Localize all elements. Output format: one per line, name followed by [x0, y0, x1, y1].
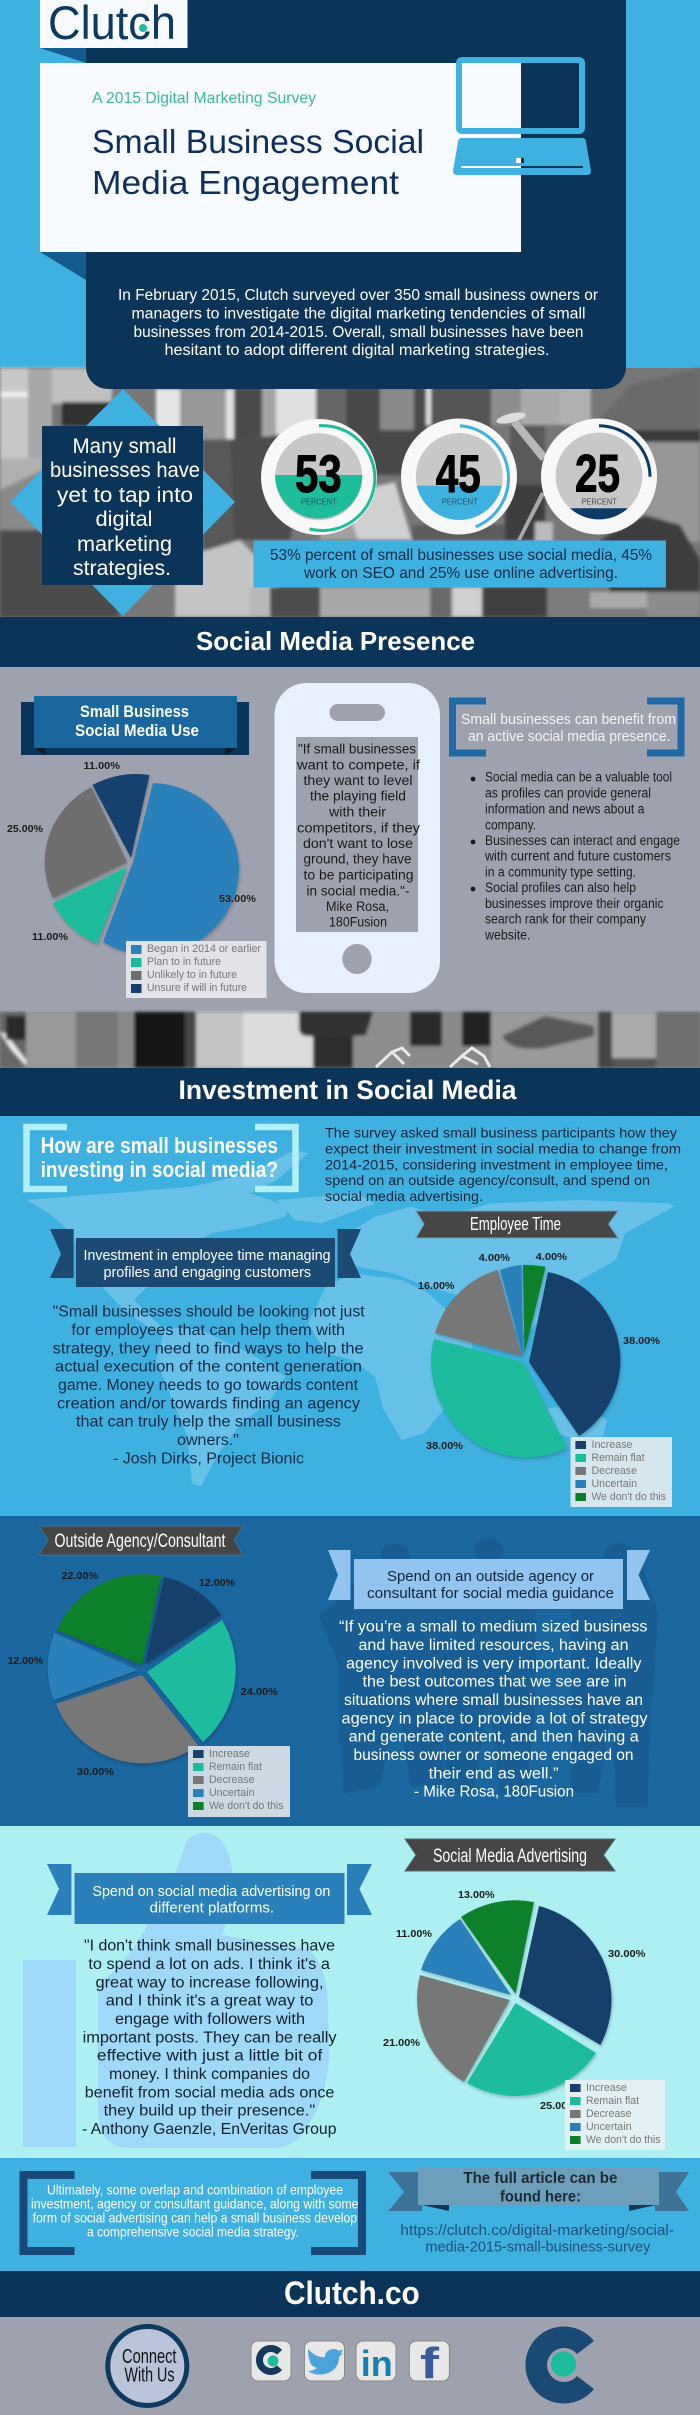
intro paragraph: In February 2015, Clutch surveyed over 350 small business owners or [118, 287, 598, 304]
quote: Josh Dirks [53, 1304, 365, 1467]
quote: Mike Rosa: agency involved is very important. Ideally [346, 1655, 642, 1672]
callout: many small businesses: yet to tap into [57, 484, 193, 507]
ribbon: small business social media use: Social Media Use [75, 722, 199, 740]
quote: Josh Dirks: actual execution of the content generation [55, 1359, 362, 1376]
ribbon: spend on social media advertising: different platforms. [150, 1900, 274, 1917]
stat: 25 percent: PERCENT [582, 498, 617, 506]
footer band: Clutch.co [0, 2271, 700, 2317]
survey paragraph [325, 1125, 681, 1204]
banner: outside agency/consultant: Outside Agency/Consultant [54, 1531, 226, 1552]
quote: Josh Dirks: strategy, they need to find ways to help the [53, 1340, 364, 1357]
pie chart: social media advertising: 11.00% [396, 1928, 433, 1940]
callout: many small businesses [10, 389, 235, 616]
phone quote text: they want to level [304, 773, 412, 788]
pie chart: employee time [418, 1251, 672, 1507]
pie chart: social media advertising: 30.00% [608, 1948, 646, 1960]
icon: laptop [453, 60, 591, 175]
pie chart: outside agency: 12.00% [8, 1655, 44, 1667]
quote: Anthony Gaenzle: to spend a lot on ads. I think it's a [88, 1956, 330, 1973]
legend: Uncertain [592, 1478, 637, 1490]
pie chart: employee time: 4.00% [479, 1252, 511, 1264]
quote: Mike Rosa: agency in place to provide a lot of strategy [342, 1710, 648, 1727]
article url [400, 2223, 674, 2256]
ribbon: investment in employee time: profiles and engaging customers [104, 1264, 311, 1281]
ribbon: full article: found here: [500, 2189, 581, 2206]
bracket: conclusion text: Ultimately, some overlap and combination of employee [47, 2182, 343, 2197]
stat: 45 percent: PERCENT [442, 498, 478, 506]
bullet list: as profiles can provide general [485, 786, 651, 801]
icon: linkedin: in [361, 2343, 393, 2384]
phone with quote [274, 683, 440, 993]
quote: Anthony Gaenzle: engage with followers with [115, 2011, 305, 2028]
bullet list: businesses improve their organic [485, 896, 664, 911]
article url: media-2015-small-business-survey [425, 2240, 651, 2256]
legend: Remain flat [586, 2095, 639, 2107]
quote: Mike Rosa: “If you’re a small to medium sized business [339, 1619, 648, 1636]
stat: 45 percent: 45 [436, 445, 481, 504]
bracket: conclusion text [24, 2175, 362, 2251]
legend: Increase [592, 1439, 632, 1451]
quote: Josh Dirks: that can truly help the small business [76, 1414, 341, 1431]
legend: Remain flat [592, 1452, 644, 1464]
badge: connect with us: With Us [124, 2365, 174, 2387]
pie chart: social media advertising: 13.00% [458, 1889, 495, 1901]
quote: Anthony Gaenzle: they build up their presence." [104, 2103, 315, 2120]
survey paragraph: social media advertising. [325, 1188, 483, 1204]
legend: Uncertain [209, 1787, 254, 1799]
pie chart: social media use: 53.00% [219, 893, 257, 905]
banner: outside agency/consultant [39, 1526, 243, 1555]
icon: facebook: f [420, 2339, 439, 2388]
bullet list: company. [485, 817, 536, 832]
bullet list: website. [484, 927, 530, 942]
ribbon: full article [388, 2167, 689, 2211]
intro paragraph: managers to investigate the digital marketing tendencies of small [132, 306, 586, 322]
title: Small Business Social [92, 123, 424, 160]
footer band: Clutch.co: Clutch.co [284, 2275, 420, 2311]
pie chart: social media use: 11.00% [32, 931, 69, 943]
bracket: conclusion text: form of social advertising can help a small business develop [33, 2210, 357, 2225]
callout: many small businesses: businesses have [50, 459, 200, 482]
bullet list: information and news about a [485, 801, 645, 816]
heading band: Investment in Social Media: Investment in Social Media [178, 1075, 517, 1105]
legend: Uncertain [586, 2121, 632, 2133]
ribbon: spend on social media advertising: Spend on social media advertising on [92, 1883, 330, 1900]
survey subtitle: A 2015 Digital Marketing Survey [92, 90, 316, 107]
stat: 25 percent [541, 418, 657, 534]
bullet list: Businesses can interact and engage [485, 833, 680, 848]
pie chart: outside agency: 24.00% [241, 1686, 279, 1698]
pie chart: outside agency [8, 1570, 290, 1817]
quote: Josh Dirks: owners." [177, 1432, 239, 1449]
panel: outside agency [0, 1516, 700, 1826]
quote: Mike Rosa [339, 1619, 648, 1801]
callout: many small businesses: marketing [77, 533, 172, 556]
ribbon: spend on outside agency: Spend on an outside agency or [387, 1568, 594, 1585]
callout: many small businesses: Many small [72, 435, 176, 458]
pie chart: social media use: 25.00% [7, 823, 44, 835]
panel: social media advertising [0, 1826, 700, 2158]
legend: Plan to in future [147, 956, 221, 968]
quote: Anthony Gaenzle: benefit from social media ads once [85, 2084, 334, 2101]
quote: Anthony Gaenzle: effective with just a little bit of [97, 2048, 323, 2065]
bracket heading: how are small businesses investing: How are small businesses [41, 1133, 278, 1158]
phone quote text: in social media."- [306, 883, 410, 898]
quote: Mike Rosa: and generate content, and then having a [349, 1729, 639, 1746]
stats summary box: 53% percent of small businesses use social media, 45% [270, 547, 652, 564]
quote: Josh Dirks: game. Money needs to go towards content [58, 1377, 359, 1394]
phone quote text: want to compete, if [296, 757, 420, 772]
ribbon: investment in employee time: Investment in employee time managing [84, 1247, 330, 1264]
quote: Mike Rosa: situations where small businesses have an [344, 1692, 643, 1709]
quote: Josh Dirks: - Josh Dirks, Project Bionic [113, 1450, 304, 1467]
stat: 53 percent: PERCENT [301, 498, 337, 506]
phone quote text: with their [328, 805, 387, 820]
legend: Decrease [209, 1774, 254, 1786]
stat: 45 percent [401, 418, 517, 534]
phone quote text: competitors, if they [297, 820, 420, 835]
quote: Mike Rosa: business owner or someone engaged on [354, 1747, 634, 1764]
pie chart: outside agency: 12.00% [199, 1577, 236, 1589]
quote: Anthony Gaenzle: "I don't think small businesses have [84, 1938, 335, 1955]
pie chart: employee time: 16.00% [418, 1280, 455, 1292]
quote: Mike Rosa: the best outcomes that we see are in [362, 1674, 626, 1691]
pie chart: outside agency: 22.00% [62, 1570, 99, 1582]
banner: social media advertising [405, 1839, 615, 1871]
bullet list: with current and future customers [484, 849, 671, 864]
legend: Unsure if will in future [147, 982, 247, 994]
badge: connect with us [108, 2326, 187, 2406]
panel: employee time [0, 1116, 700, 1516]
panel: conclusion [0, 2158, 700, 2271]
phone quote text: don't want to lose [303, 836, 413, 851]
banner: social media advertising: Social Media Advertising [433, 1846, 587, 1867]
stats summary box [254, 540, 666, 588]
bracket: conclusion text: a comprehensive social media strategy. [87, 2224, 299, 2239]
legend: Decrease [592, 1465, 637, 1477]
stat: 53 percent: 53 [295, 445, 342, 504]
badge: connect with us: Connect [122, 2346, 177, 2368]
phone quote text: Mike Rosa, [326, 899, 389, 914]
pie chart: social media use: 11.00% [84, 760, 121, 772]
legend [188, 1746, 290, 1817]
quote: Anthony Gaenzle: important posts. They can be really [83, 2029, 337, 2046]
ribbon: small business social media use: Small Business [80, 703, 189, 721]
legend: We don't do this [592, 1491, 666, 1503]
stat: 25 percent: 25 [575, 444, 620, 504]
bracket heading: benefit: Small businesses can benefit from [461, 712, 676, 728]
title [92, 123, 424, 201]
legend: Increase [586, 2082, 627, 2094]
survey paragraph: The survey asked small business participants how they [325, 1125, 677, 1141]
pie chart: employee time: 38.00% [623, 1335, 661, 1347]
quote: Anthony Gaenzle: - Anthony Gaenzle, EnVeritas Group [82, 2121, 336, 2138]
heading band: Social Media Presence [0, 617, 700, 667]
icon: clutch social [251, 2341, 291, 2381]
legend: Began in 2014 or earlier [147, 943, 261, 955]
quote: Josh Dirks: for employees that can help them with [71, 1322, 345, 1339]
icon: thumbs up background [23, 1833, 329, 2148]
ribbon: small business social media use [21, 696, 249, 755]
phone quote text: 180Fusion [329, 915, 387, 930]
phone quote text: to be participating [304, 868, 414, 883]
bullet list: in a community type setting. [485, 865, 636, 880]
article url: https://clutch.co/digital-marketing/social- [400, 2223, 674, 2239]
legend: Decrease [586, 2108, 632, 2120]
intro paragraph: businesses from 2014-2015. Overall, small businesses have been [134, 324, 584, 341]
legend [565, 2080, 665, 2150]
phone quote text: the playing field [310, 789, 406, 804]
pie chart: social media advertising [383, 1889, 665, 2150]
pie chart: employee time: 4.00% [536, 1251, 568, 1263]
heading band: Social Media Presence: Social Media Presence [196, 626, 475, 656]
bullet list: Social media can be a valuable tool [485, 770, 672, 785]
intro paragraph: hesitant to adopt different digital marketing strategies. [164, 342, 550, 359]
bullet list [471, 770, 680, 942]
legend: Unlikely to in future [147, 969, 237, 981]
pie chart: outside agency: 30.00% [77, 1766, 115, 1778]
bracket heading: how are small businesses investing [26, 1127, 296, 1189]
title: Media Engagement [92, 164, 399, 201]
phone quote text: "If small businesses [298, 741, 416, 756]
quote: Anthony Gaenzle: and I think it's a great way to [106, 1993, 313, 2010]
pie chart: social media advertising: 25.00% [540, 2100, 578, 2112]
quote: Anthony Gaenzle: great way to increase following, [96, 1974, 324, 1991]
quote: Josh Dirks: "Small businesses should be looking not just [53, 1304, 365, 1321]
legend: Remain flat [209, 1761, 262, 1773]
icon: large Clutch C [525, 2327, 594, 2404]
bracket heading: how are small businesses investing: investing in social media? [41, 1157, 278, 1182]
survey paragraph: 2014-2015, considering investment in employee time, [325, 1156, 668, 1172]
quote: Anthony Gaenzle: money. I think companies do [109, 2066, 310, 2083]
callout: many small businesses: digital [96, 508, 152, 531]
ribbon: spend on outside agency [328, 1550, 650, 1609]
photo band: feet [0, 1012, 700, 1068]
quote: Mike Rosa: - Mike Rosa, 180Fusion [414, 1784, 574, 1801]
bracket heading: benefit: an active social media presence. [468, 729, 670, 745]
survey paragraph: spend on an outside agency/consult, and spend on [325, 1172, 650, 1188]
icon: twitter [304, 2341, 344, 2381]
quote: Anthony Gaenzle [82, 1938, 337, 2138]
quote: Mike Rosa: and have limited resources, having an [358, 1637, 628, 1654]
legend [126, 941, 266, 998]
ribbon: spend on social media advertising [47, 1864, 372, 1924]
pie chart: social media advertising: 21.00% [383, 2037, 421, 2049]
ribbon: full article: The full article can be [463, 2170, 617, 2187]
bracket: conclusion text: investment, agency or consultant guidance, along with some [31, 2196, 358, 2211]
banner: employee time: Employee Time [470, 1214, 561, 1234]
title card [40, 63, 521, 252]
legend: We don't do this [209, 1800, 284, 1812]
panel: connect footer [0, 2317, 700, 2415]
silhouettes of people [319, 1538, 658, 1807]
pie chart: employee time: 38.00% [426, 1440, 464, 1452]
legend [570, 1437, 672, 1507]
bracket heading: benefit [452, 701, 681, 753]
intro paragraph [118, 287, 598, 359]
bullet list: search rank for their company [485, 912, 646, 927]
panel: social media presence [0, 667, 700, 1012]
world map background [27, 1150, 674, 1487]
bullet list: Social profiles can also help [485, 880, 636, 895]
stat: 53 percent [261, 419, 377, 535]
ribbon: investment in employee time [50, 1229, 361, 1287]
legend: Increase [209, 1748, 250, 1760]
icon: facebook [409, 2339, 449, 2388]
survey paragraph: expect their investment in social media to change from [325, 1141, 681, 1157]
phone quote text [296, 741, 420, 930]
banner: employee time [416, 1211, 618, 1238]
callout: many small businesses: strategies. [73, 557, 171, 580]
heading band: Investment in Social Media [0, 1068, 700, 1116]
photo band: street crowd [0, 368, 700, 617]
quote: Josh Dirks: creation and/or towards finding an agency [57, 1395, 360, 1412]
panel: intro dark card [40, 0, 626, 389]
quote: Mike Rosa: their end as well.” [429, 1765, 559, 1782]
ribbon: spend on outside agency: consultant for social media guidance [367, 1585, 614, 1602]
legend: We don't do this [586, 2134, 661, 2146]
phone quote text: ground, they have [304, 852, 412, 867]
pie chart: social media use [7, 760, 266, 998]
stats summary box: work on SEO and 25% use online advertising. [303, 565, 618, 582]
